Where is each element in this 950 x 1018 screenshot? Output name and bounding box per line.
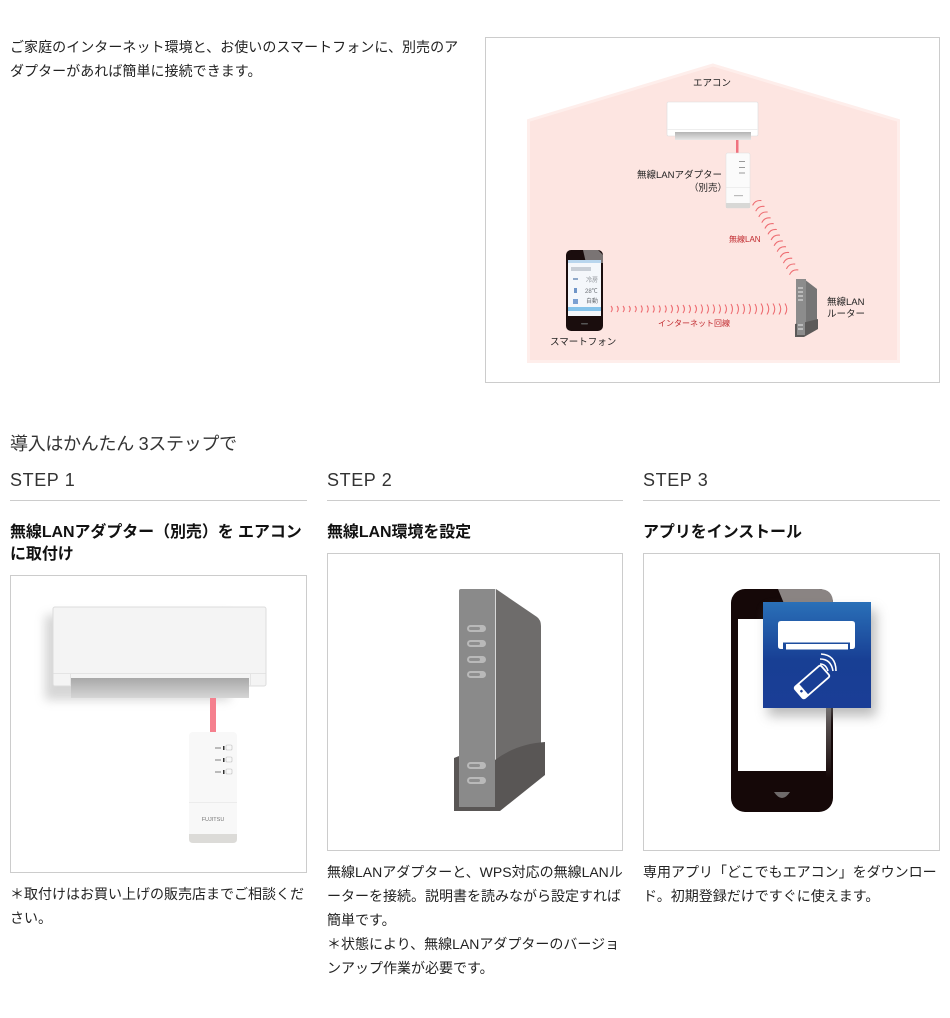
wireless adapter — [189, 732, 237, 843]
step 2 label: STEP 2 — [327, 470, 392, 490]
intro text: ダプターがあれば簡単に接続できます。 — [10, 63, 262, 79]
internet line waves — [611, 304, 787, 314]
small smartphone: 28℃ — [585, 288, 598, 295]
step 3 description — [643, 864, 937, 904]
panel: step 3 image — [643, 553, 940, 851]
cable — [210, 698, 216, 732]
section heading: 導入はかんたん 3ステップで — [10, 434, 237, 454]
cable — [736, 140, 738, 153]
label: router — [827, 296, 865, 320]
step 2 description: 無線LANアダプターと、WPS対応の無線LANル — [327, 864, 623, 880]
router — [454, 589, 545, 811]
small smartphone: 冷房 — [586, 276, 598, 284]
intro text — [10, 39, 458, 79]
step 1 note: さい。 — [10, 910, 52, 926]
small smartphone: 自動 — [586, 297, 598, 305]
label: smartphone: スマートフォン — [550, 337, 616, 348]
step 3 label — [643, 468, 940, 501]
app icon — [763, 602, 876, 716]
step 2 description — [327, 864, 623, 976]
step 2 description: ンアップ作業が必要です。 — [327, 960, 494, 976]
step 2 description: ーターを接続。説明書を読みながら設定すれば — [327, 888, 621, 904]
panel: step 2 image — [327, 553, 623, 851]
label: wireless adapter: （別売） — [689, 182, 727, 194]
small air conditioner — [667, 102, 758, 140]
panel: connection diagram — [485, 37, 940, 383]
step 1 label — [10, 468, 307, 501]
step 3 description: 専用アプリ「どこでもエアコン」をダウンロー — [643, 864, 937, 880]
step 3 label: STEP 3 — [643, 470, 708, 490]
step 3 description: ド。初期登録だけですぐに使えます。 — [643, 888, 879, 904]
label: wireless LAN: 無線LAN — [729, 234, 761, 244]
step 2 heading: 無線LAN環境を設定 — [327, 524, 471, 541]
step 1 heading: 無線LANアダプター（別売）を エアコン — [10, 524, 302, 541]
step 2 label — [327, 468, 623, 501]
small router — [795, 279, 818, 337]
label: air conditioner: エアコン — [693, 78, 731, 89]
house background — [528, 65, 898, 362]
step 1 note: ＊取付けはお買い上げの販売店までご相談くだ — [10, 886, 304, 902]
wireless LAN waves — [753, 200, 798, 275]
step 1 note — [10, 886, 304, 926]
step 1 heading — [10, 523, 302, 563]
label: router: ルーター — [827, 309, 865, 320]
step 3 heading: アプリをインストール — [643, 524, 802, 541]
step 1 label: STEP 1 — [10, 470, 75, 490]
step 2 description: 簡単です。 — [327, 912, 396, 928]
wireless adapter: FUJITSU — [202, 817, 224, 823]
label: router: 無線LAN — [827, 296, 865, 308]
small wireless adapter — [726, 153, 750, 208]
label: wireless adapter: 無線LANアダプター — [637, 169, 722, 181]
panel: step 1 image — [10, 575, 307, 873]
intro text: ご家庭のインターネット環境と、お使いのスマートフォンに、別売のア — [10, 39, 458, 55]
step 2 description: ＊状態により、無線LANアダプターのバージョ — [327, 936, 619, 952]
smartphone — [731, 589, 833, 812]
small smartphone — [566, 250, 603, 331]
label: wireless adapter — [637, 169, 727, 194]
label: internet line: インターネット回線 — [658, 318, 730, 328]
air conditioner — [45, 607, 266, 700]
step 1 heading: に取付け — [10, 546, 74, 563]
